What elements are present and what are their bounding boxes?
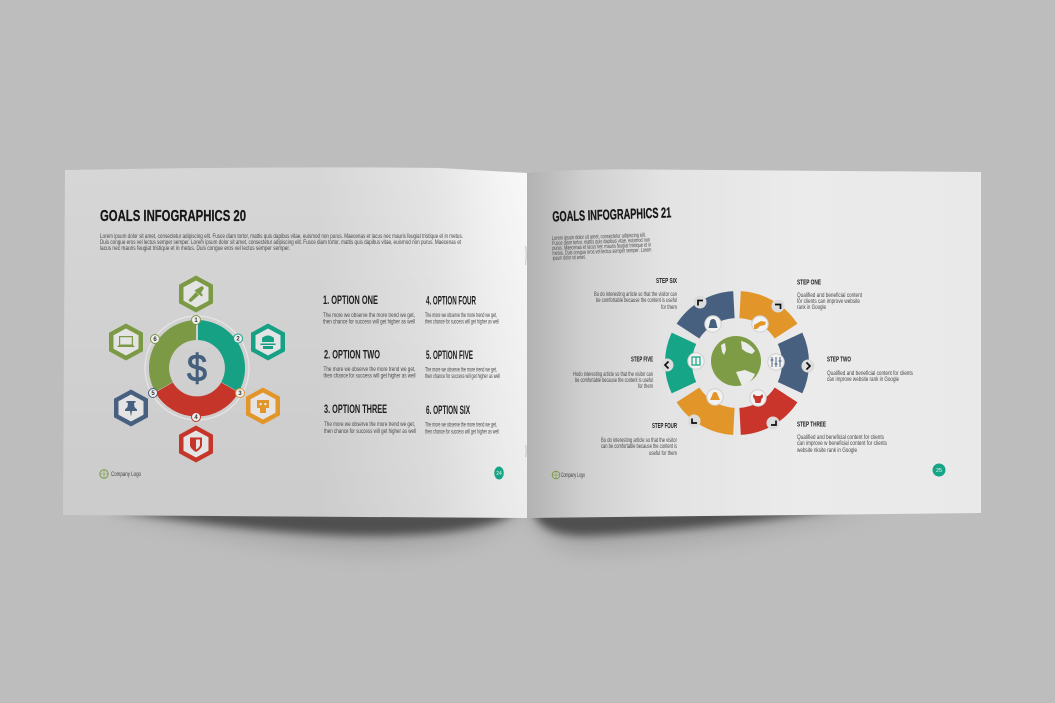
number badges: 4 xyxy=(194,415,198,421)
ring segment teal xyxy=(198,320,245,392)
segment five teal xyxy=(665,333,696,393)
dollar sign: $ xyxy=(187,348,207,390)
icon: shield hexagon xyxy=(179,426,213,462)
icon circles xyxy=(688,316,784,406)
title: goals infographics 20: GOALS INFOGRAPHICS 20 xyxy=(100,208,246,225)
step four: STEP FOUR xyxy=(652,421,677,430)
icon: laptop hexagon xyxy=(109,324,143,360)
option five xyxy=(425,350,500,380)
icon: red bug xyxy=(753,394,763,403)
ring segment green xyxy=(149,320,196,392)
step four xyxy=(601,421,678,457)
intro paragraph right: Fusce diam tortor, mattis quis dapibus vitae, euismod non xyxy=(552,238,650,247)
step two: STEP TWO xyxy=(827,354,851,364)
step six: STEP SIX xyxy=(656,276,677,285)
company logo right: Company Logo xyxy=(561,473,585,479)
option six: then chance for success will get higher as well xyxy=(425,428,499,436)
option three: The more we observe the more trend we get, xyxy=(324,421,415,428)
step six: for them xyxy=(661,304,677,311)
number badges xyxy=(148,316,244,422)
intro paragraph right: ipsum dolor sit amet. xyxy=(553,255,586,262)
intro paragraph left xyxy=(100,233,463,252)
globe xyxy=(711,336,761,386)
step two: can improve website rank in Google xyxy=(827,376,899,383)
intro paragraph left: Lorem ipsum dolor sit amet, consectetur adipiscing elit. Fusce diam tortor, mattis quis dapibus vitae, euismod non purus. Maecenas et lacus nec mauris feugiat tristique et in metus. xyxy=(100,233,463,240)
step six: be comfortable because the content is useful xyxy=(596,297,677,304)
arrow chevrons xyxy=(665,300,810,425)
step four: can be comfortable because the content is xyxy=(601,443,677,450)
step one: rank in Google xyxy=(797,304,826,311)
wide soft page shadow xyxy=(100,510,880,555)
option three xyxy=(324,404,416,435)
option one: then chance for success will get higher as well xyxy=(323,318,415,326)
step four: useful for them xyxy=(649,450,677,457)
step three: can improve w beneficial content for clients xyxy=(797,440,888,447)
step one: Qualified and beneficial content xyxy=(797,292,862,299)
option one: The more we observe the more trend we get, xyxy=(323,312,415,319)
option four: then chance for success will get higher as well xyxy=(425,318,499,326)
page number 24 xyxy=(494,466,504,480)
right page xyxy=(527,169,981,518)
intro paragraph left: Duis congue eros vel lectus semper semper. Lorem ipsum dolor sit amet, consectetur adipiscing elit. Fusce diam tortor, mattis quis dapibus vitae, euismod non purus. Maecenas et xyxy=(100,239,461,246)
page shadows xyxy=(110,508,840,536)
option two: The more we observe the more trend we get, xyxy=(324,366,416,373)
icon: user xyxy=(708,319,718,328)
option three: 3. OPTION THREE xyxy=(324,404,387,416)
number badges: 1 xyxy=(194,318,198,324)
step three xyxy=(796,420,888,454)
option five: The more we observe the more trend we get, xyxy=(425,366,497,374)
company logo right xyxy=(552,471,585,479)
step one xyxy=(797,278,862,311)
intro paragraph right: metus. Duis congue eros vel lectus semper semper. Lorem xyxy=(552,248,652,257)
segment four orange xyxy=(677,388,735,435)
icon: robot hexagon xyxy=(246,388,280,424)
intro paragraph right xyxy=(552,233,652,262)
step six: Bu do interesting article so that the visitor can xyxy=(594,291,677,298)
step five: STEP FIVE xyxy=(631,354,653,364)
page number 25 xyxy=(932,464,946,476)
number badges: 2 xyxy=(236,337,240,343)
icon: book xyxy=(692,357,700,365)
step four: Bu do interesting article so that the visitor xyxy=(601,437,678,444)
icon: drill xyxy=(754,321,766,329)
option six xyxy=(425,405,499,436)
intro paragraph right: purus. Maecenas et lacus nec mauris feugiat tristique et in xyxy=(552,243,651,252)
option two: 2. OPTION TWO xyxy=(324,350,380,362)
segment three red xyxy=(739,388,797,435)
option two xyxy=(324,350,416,380)
step one: for clients can improve website xyxy=(797,298,860,305)
step two: Qualified and beneficial content for clients xyxy=(827,370,914,377)
step five: Hodo interesting article so that the visitor can xyxy=(573,371,653,378)
option five: then chance for success will get higher as well xyxy=(425,373,500,380)
step three: Qualified and beneficial content for clients xyxy=(797,434,885,441)
option six: 6. OPTION SIX xyxy=(426,405,470,417)
step one: STEP ONE xyxy=(797,278,821,286)
option four: 4. OPTION FOUR xyxy=(426,296,476,308)
icon: orange figure xyxy=(710,392,720,400)
arrow buttons xyxy=(660,296,814,430)
number badges: 5 xyxy=(151,391,155,397)
icon: pin hexagon xyxy=(114,390,148,426)
ring segment red xyxy=(155,382,239,417)
option two: then chance for success will get higher as well xyxy=(324,372,416,380)
option six: The more we observe the more trend we get, xyxy=(425,422,497,428)
title: goals infographics 21: GOALS INFOGRAPHICS 21 xyxy=(552,205,672,225)
page content xyxy=(100,205,946,480)
icon: hat hexagon xyxy=(251,324,285,360)
step five xyxy=(573,354,653,390)
intro paragraph left: lacus nec mauris feugiat tristique et in metus. Duis congue eros vel lectus semper semper. xyxy=(100,245,290,252)
option four xyxy=(425,296,499,326)
option one xyxy=(323,295,415,326)
chart: dollar ring xyxy=(145,316,249,422)
intro paragraph right: Lorem ipsum dolor sit amet, consectetur adipiscing elit. xyxy=(552,233,646,242)
step five: be comfortable because the content is useful xyxy=(575,377,653,384)
step three: STEP THREE xyxy=(797,420,826,428)
option three: then chance for success will get higher as well xyxy=(324,428,416,435)
icon: sliders xyxy=(770,357,782,367)
icon: dropper hexagon xyxy=(179,276,213,312)
segment six blue xyxy=(677,291,735,338)
number badges: 6 xyxy=(153,337,157,343)
step three: website nksite rank in Google xyxy=(796,447,857,454)
option one: 1. OPTION ONE xyxy=(323,295,378,307)
option five: 5. OPTION FIVE xyxy=(426,350,473,362)
left page xyxy=(63,167,527,518)
page number 25: 25 xyxy=(936,468,942,474)
company logo left: Company Logo xyxy=(111,471,141,478)
step six xyxy=(594,276,677,311)
step five: for them xyxy=(638,383,653,390)
option four: The more we observe the more trend we get, xyxy=(425,312,497,319)
step two xyxy=(827,354,914,383)
chart: step wheel xyxy=(660,291,814,435)
page number 24: 24 xyxy=(496,471,502,477)
segment one orange xyxy=(739,291,797,338)
company logo left xyxy=(100,470,141,478)
number badges: 3 xyxy=(238,391,242,397)
segment two blue xyxy=(778,333,809,393)
